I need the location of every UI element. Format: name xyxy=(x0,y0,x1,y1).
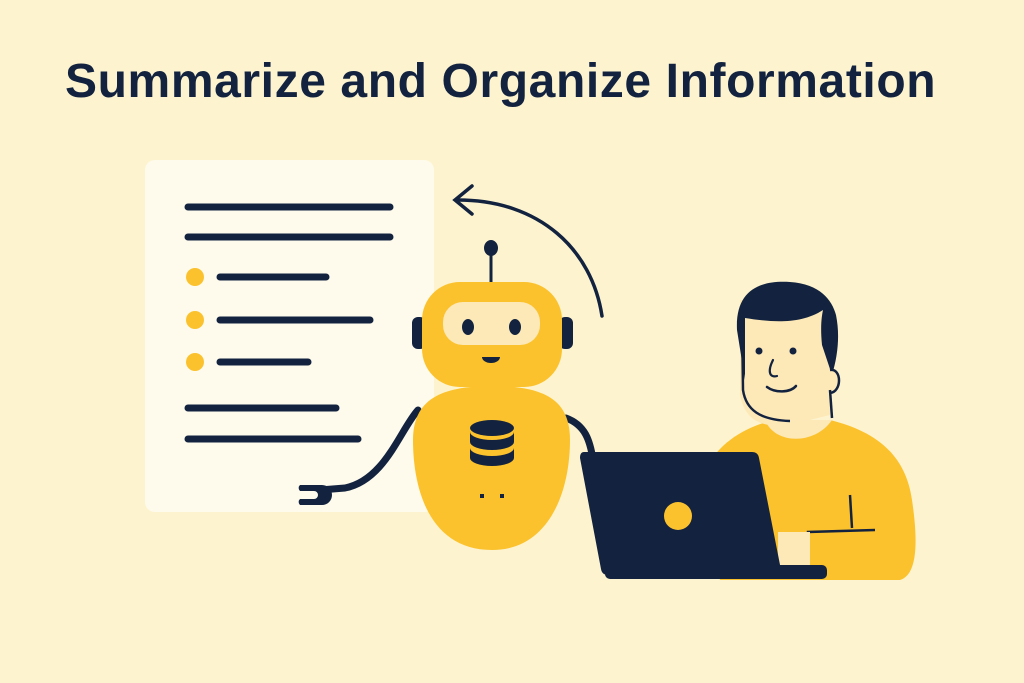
panel: document xyxy=(145,160,434,512)
icon: database xyxy=(470,420,514,466)
title: Summarize and Organize Information xyxy=(65,55,936,108)
robot xyxy=(299,240,593,550)
person xyxy=(705,282,916,580)
laptop xyxy=(580,452,827,579)
arrow xyxy=(455,186,602,316)
